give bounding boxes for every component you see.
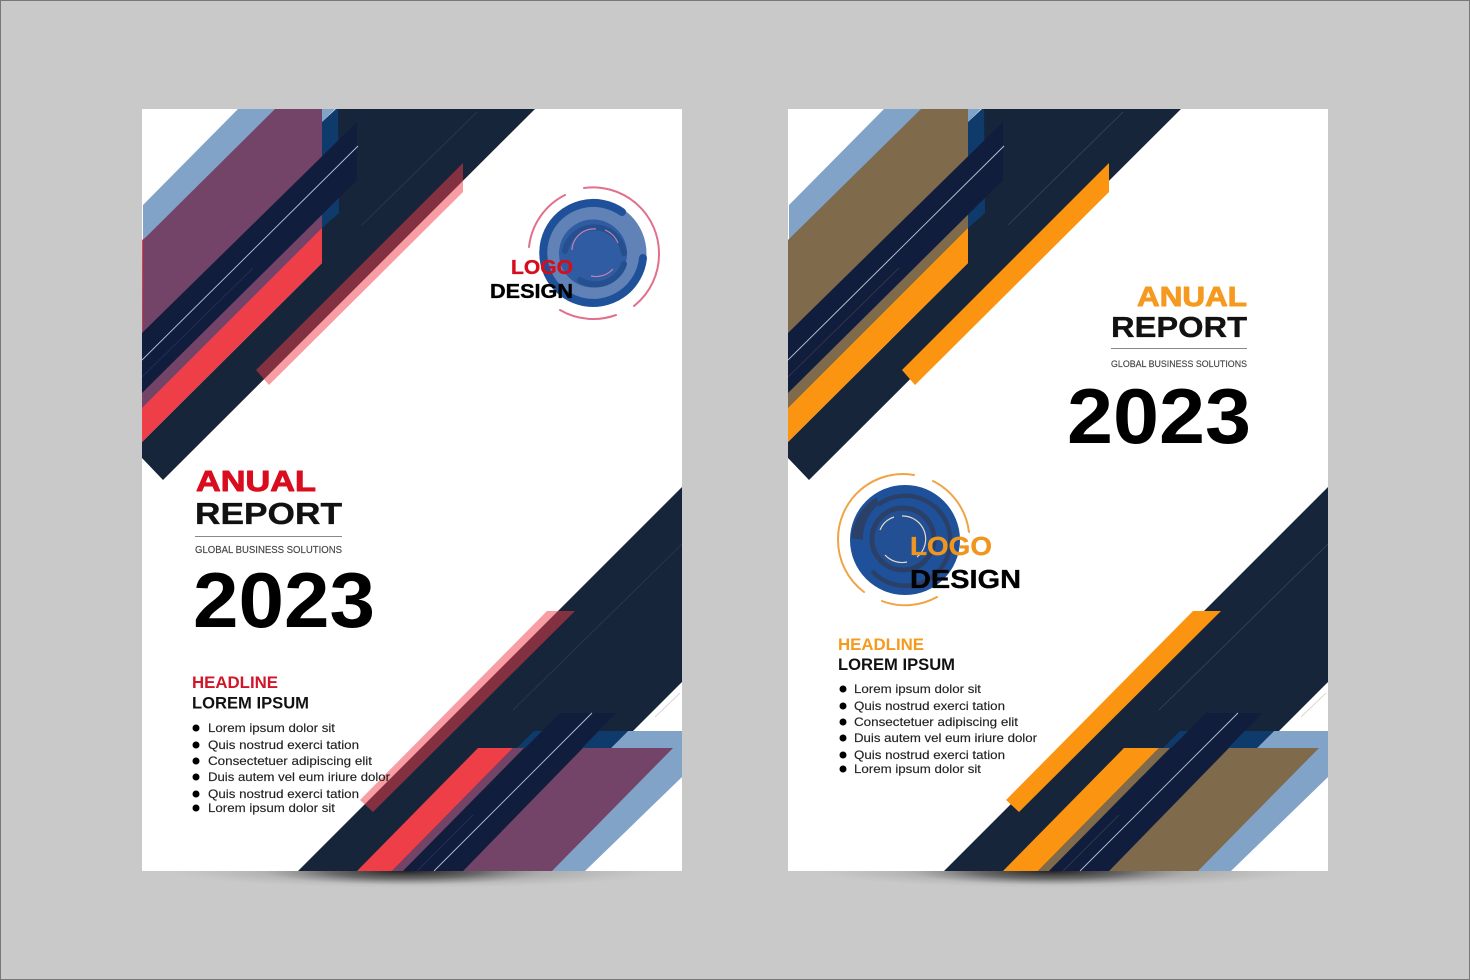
title: anual report	[195, 466, 342, 556]
headline: LOREM IPSUM	[192, 694, 309, 712]
logo text: DESIGN	[910, 564, 1021, 594]
page background	[142, 109, 682, 871]
bullet list: Duis autem vel eum iriure dolor	[854, 731, 1037, 745]
title: anual report: REPORT	[1111, 312, 1247, 344]
logo text: DESIGN	[490, 281, 573, 303]
logo text	[910, 531, 1021, 594]
bullet list: Quis nostrud exerci tation	[208, 787, 359, 801]
bullet list: Lorem ipsum dolor sit	[208, 721, 336, 735]
panel: left cover page	[142, 107, 682, 871]
title: anual report: GLOBAL BUSINESS SOLUTIONS	[1111, 359, 1247, 370]
bullet list: Lorem ipsum dolor sit	[208, 801, 336, 815]
year: 2023	[1067, 372, 1251, 460]
headline	[838, 635, 955, 674]
title: anual report: GLOBAL BUSINESS SOLUTIONS	[195, 545, 342, 556]
page background	[788, 109, 1328, 871]
bullet list: Duis autem vel eum iriure dolor	[208, 770, 390, 784]
logo text: LOGO	[511, 257, 573, 279]
bullet list: Lorem ipsum dolor sit	[854, 682, 982, 696]
bullet list: Quis nostrud exerci tation	[854, 748, 1005, 762]
logo text	[490, 257, 573, 303]
title: anual report: ANUAL	[1137, 281, 1247, 312]
top-left diagonal graphic	[142, 107, 535, 480]
top-left diagonal graphic	[788, 107, 1181, 480]
title: anual report	[1111, 281, 1247, 370]
bullet list	[840, 682, 1037, 776]
bullet list: Consectetuer adipiscing elit	[208, 754, 373, 768]
year: 2023	[193, 556, 375, 644]
bottom-right diagonal graphic	[298, 487, 682, 871]
headline	[192, 673, 309, 712]
logo: left circular emblem	[529, 187, 659, 319]
title: anual report: ANUAL	[196, 466, 316, 498]
headline: HEADLINE	[838, 635, 924, 654]
bullet list: Quis nostrud exerci tation	[854, 699, 1005, 713]
bullet list: Lorem ipsum dolor sit	[854, 762, 982, 776]
bullet list: Consectetuer adipiscing elit	[854, 715, 1019, 729]
headline: HEADLINE	[192, 673, 278, 692]
logo: right circular emblem	[838, 474, 969, 605]
logo text: LOGO	[910, 531, 992, 561]
bullet list	[192, 721, 390, 815]
headline: LOREM IPSUM	[838, 655, 955, 674]
bullet list: Quis nostrud exerci tation	[208, 738, 359, 752]
right page shadow	[816, 854, 1306, 888]
title: anual report: REPORT	[195, 496, 342, 531]
left page shadow	[170, 854, 660, 888]
bottom-right diagonal graphic	[944, 487, 1328, 871]
panel: right cover page	[788, 107, 1328, 871]
